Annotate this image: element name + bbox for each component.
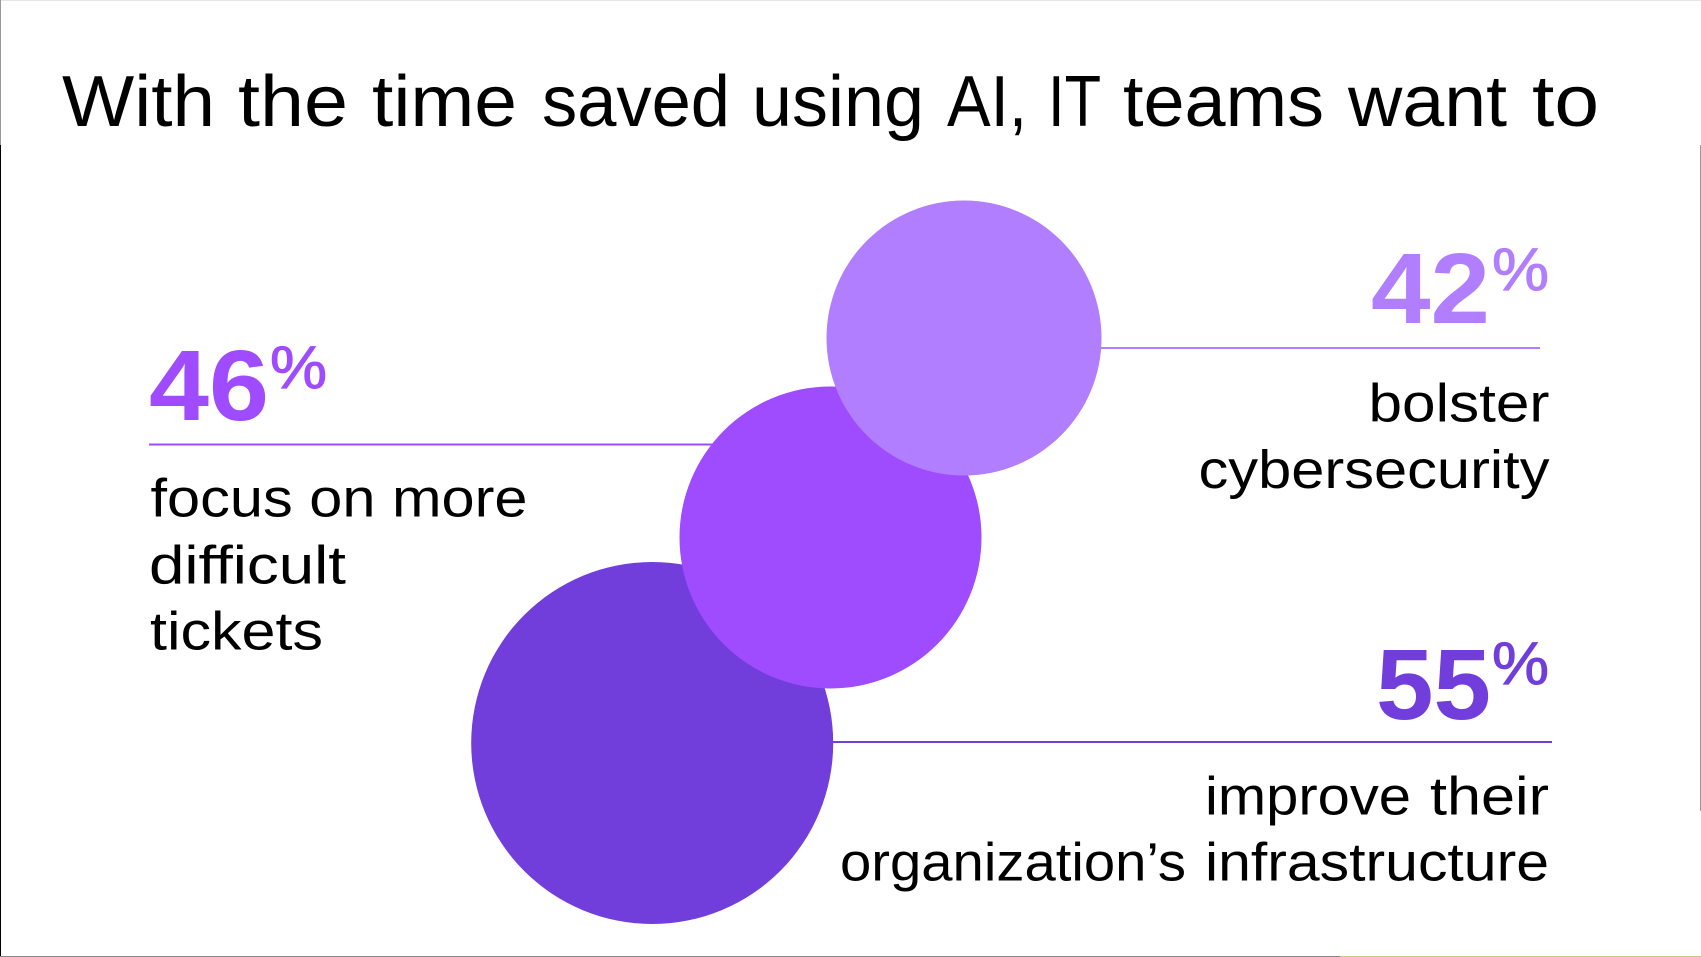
title: IT <box>1048 62 1101 142</box>
value: 55%: 55 <box>1376 629 1491 741</box>
label: bolster cybersecurity <box>1198 374 1550 500</box>
title <box>62 62 1599 142</box>
label: improve their organization's infrastructure: organization’s <box>840 832 1186 892</box>
title: saved <box>542 62 730 142</box>
overlapping circles <box>471 200 1102 924</box>
label: improve their organization's infrastructure: improve <box>1205 766 1411 826</box>
circle: 46% <box>680 386 982 688</box>
connector line: 42% <box>1095 347 1540 349</box>
value: 55%: % <box>1492 630 1549 697</box>
title: teams <box>1123 62 1324 142</box>
title: want <box>1347 62 1507 142</box>
title: With <box>62 62 215 142</box>
value: 46%: % <box>270 334 327 401</box>
title: time <box>372 62 517 142</box>
label: focus on more difficult tickets: difficult <box>149 536 346 596</box>
connector line: 46% <box>149 444 719 446</box>
label: focus on more difficult tickets: focus on more <box>150 468 528 528</box>
title: using <box>752 62 924 142</box>
connector line: 55% <box>825 741 1552 743</box>
value: 46% <box>149 330 327 442</box>
stat: 42% bolster cybersecurity <box>1198 233 1550 500</box>
label: focus on more difficult tickets: tickets <box>150 602 323 662</box>
title: to <box>1532 62 1599 142</box>
label: improve their organization's infrastructure <box>840 766 1549 892</box>
label: bolster cybersecurity: bolster <box>1368 374 1550 434</box>
title: the <box>238 62 348 142</box>
label: bolster cybersecurity: cybersecurity <box>1198 440 1550 500</box>
stat: 55% improve their organization's infrastructure <box>840 629 1549 892</box>
label: improve their organization's infrastructure: infrastructure <box>1205 832 1549 892</box>
value: 55% <box>1376 629 1549 741</box>
value: 42% <box>1371 233 1549 345</box>
stat: 46% focus on more difficult tickets <box>149 330 528 662</box>
circle: 42% <box>826 200 1102 476</box>
value: 46%: 46 <box>149 330 269 442</box>
title: AI, <box>947 62 1027 142</box>
label: improve their organization's infrastructure: their <box>1430 766 1549 826</box>
label: focus on more difficult tickets <box>149 468 528 662</box>
value: 42%: 42 <box>1371 233 1490 345</box>
value: 42%: % <box>1492 236 1549 303</box>
circle: 55% <box>471 562 833 924</box>
